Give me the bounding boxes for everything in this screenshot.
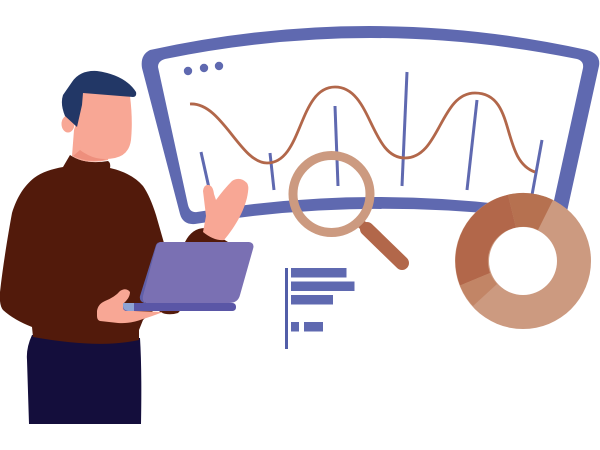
far arm <box>150 228 232 314</box>
chart: vertical grid lines <box>201 72 542 195</box>
ear <box>62 116 74 132</box>
panel: curved screen frame <box>142 26 599 224</box>
face <box>74 92 132 159</box>
laptop <box>123 242 254 311</box>
chart: donut <box>455 193 591 329</box>
chart: horizontal bars <box>285 268 354 349</box>
neck <box>72 130 112 162</box>
icon: three window dots <box>184 62 223 75</box>
hair <box>62 71 136 127</box>
raised hand <box>203 179 248 240</box>
person: man <box>0 71 253 424</box>
icon: magnifying glass <box>293 156 402 263</box>
neck shadow <box>73 150 107 161</box>
sweater <box>0 155 166 344</box>
chart: wave line <box>190 87 535 172</box>
holding hand <box>97 289 163 323</box>
trousers <box>27 335 141 424</box>
